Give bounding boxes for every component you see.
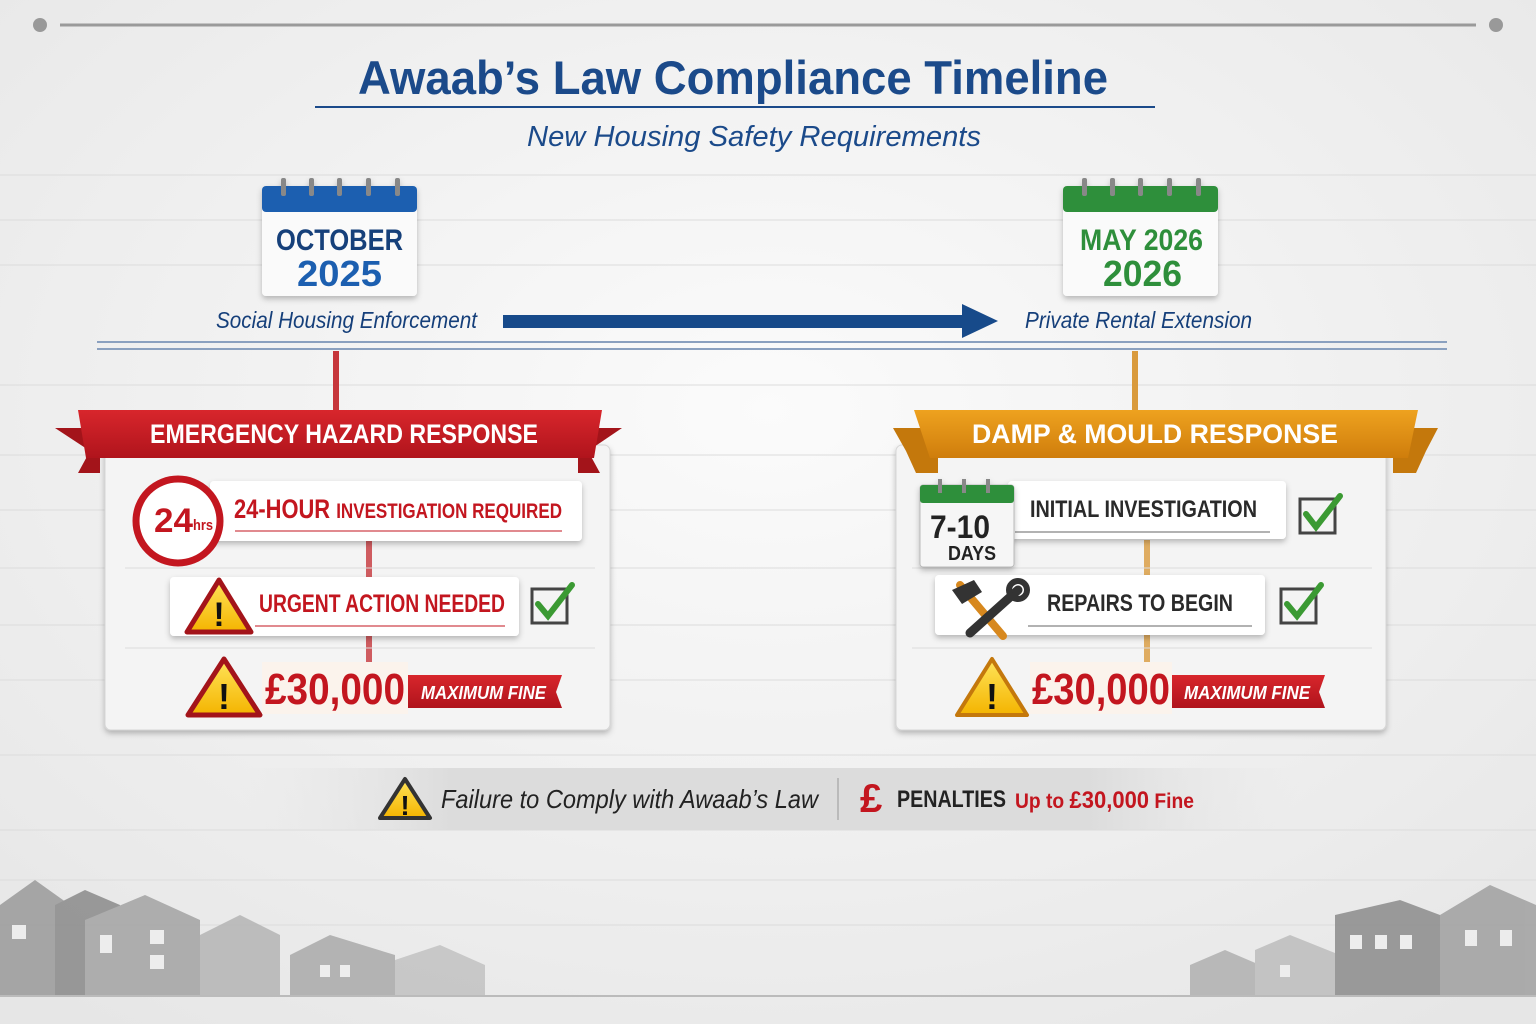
panel: emergency hazard: [55, 410, 622, 730]
calendar: October 2025: 2025: [297, 253, 382, 294]
calendar: May 2026: [1063, 178, 1218, 296]
row: fine: !: [986, 676, 998, 717]
icon: 7-10 days calendar: 7-10: [930, 509, 990, 545]
label: social housing: Social Housing Enforcement: [216, 307, 478, 333]
icon: 24hrs clock: hrs: [193, 517, 213, 534]
ribbon header: DAMP & MOULD RESPONSE: [972, 419, 1338, 449]
row: fine: £30,000: [265, 665, 405, 714]
row: initial investigation: INITIAL INVESTIGATION: [1030, 496, 1257, 523]
icon: warning: !: [213, 596, 225, 634]
icon: warning: !: [400, 790, 410, 821]
row: 24-hour: [136, 479, 582, 563]
icon: checkbox: [1300, 496, 1340, 533]
icon: 24hrs clock: 24: [154, 502, 193, 540]
calendar: October 2025: [262, 178, 417, 296]
calendar: May 2026: 2026: [1103, 253, 1182, 294]
timeline line: [97, 342, 1447, 349]
row: 24-hour: 24-HOUR INVESTIGATION REQUIRED: [234, 494, 562, 524]
row: fine: £30,000: [1032, 665, 1170, 714]
icon: tools: [952, 580, 1027, 636]
row: urgent action: [170, 577, 519, 636]
calendar: May 2026: MAY 2026: [1080, 224, 1203, 257]
houses right: [1190, 885, 1536, 995]
ribbon header: [55, 410, 622, 473]
icon: warning: [380, 779, 430, 821]
row: fine: MAXIMUM FINE: [1184, 683, 1311, 703]
row: urgent action: URGENT ACTION NEEDED: [259, 590, 505, 618]
ribbon header: EMERGENCY HAZARD RESPONSE: [150, 419, 538, 449]
penalty bar: PENALTIES: [897, 786, 1006, 813]
icon: 7-10 days calendar: [920, 479, 1014, 567]
top decorative border: [33, 18, 1503, 32]
penalty bar: [240, 768, 1300, 830]
row: repairs: REPAIRS TO BEGIN: [1047, 590, 1233, 617]
penalty bar: £: [860, 777, 882, 821]
label: private rental: Private Rental Extension: [1025, 307, 1252, 333]
subtitle: New Housing Safety Requirements: [527, 121, 981, 153]
row: repairs: [935, 575, 1265, 636]
title: Awaab’s Law Compliance Timeline: [358, 51, 1108, 104]
row: fine: [957, 659, 1325, 717]
penalty bar: Up to £30,000 Fine: [1015, 787, 1194, 814]
icon: 7-10 days calendar: DAYS: [948, 543, 996, 565]
panel: damp & mould: [893, 410, 1438, 730]
row: fine: MAXIMUM FINE: [421, 683, 547, 703]
row: fine: !: [218, 676, 230, 717]
icon: checkbox: [1281, 585, 1321, 623]
icon: 24hrs clock: [136, 479, 220, 563]
icon: warning: [187, 580, 251, 634]
row: fine: [188, 659, 562, 717]
icon: checkbox: [532, 585, 572, 623]
ribbon header: [893, 410, 1438, 473]
arrow: [503, 304, 998, 338]
calendar: October 2025: OCTOBER: [276, 224, 403, 257]
houses left: [0, 880, 485, 995]
row: initial investigation: [1008, 481, 1286, 539]
connectors: [333, 351, 1138, 411]
penalty bar: Failure to Comply with Awaab’s Law: [441, 784, 820, 814]
